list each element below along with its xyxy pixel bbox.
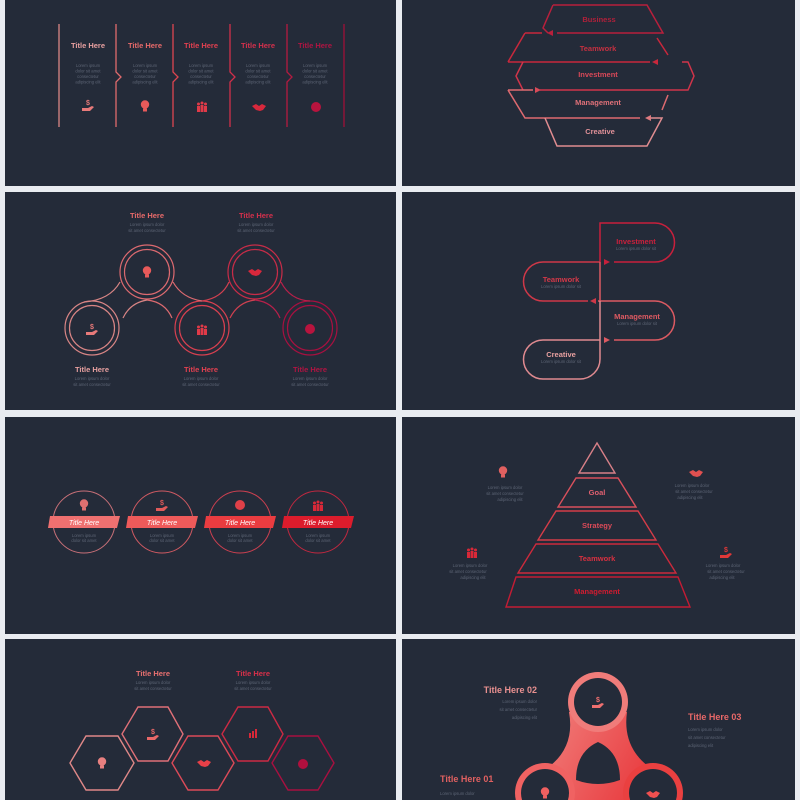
labels bbox=[541, 237, 660, 364]
labels: Title Here 03 bbox=[688, 712, 741, 722]
titles and text: Title Here bbox=[130, 211, 164, 220]
labels: adipiscing elit bbox=[512, 715, 538, 720]
labels: sit amet consectetur bbox=[688, 735, 726, 740]
titles bbox=[71, 41, 332, 50]
lorem texts: dolor sit amet bbox=[188, 68, 214, 74]
panel: slide 5 circle banners: Lorem ipsum bbox=[72, 533, 97, 538]
side callouts: sit amet consectetur bbox=[449, 569, 487, 574]
side callouts: Lorem ipsum dolor bbox=[453, 563, 488, 568]
panel: slide 5 circle banners: dolor sit amet bbox=[305, 538, 331, 543]
labels: Title Here 01 bbox=[440, 774, 493, 784]
side callouts: sit amet consectetur bbox=[707, 569, 745, 574]
titles and text: sit amet consectetur bbox=[182, 382, 220, 387]
titles: Title Here bbox=[128, 41, 162, 50]
panel: slide 6 pyramid: Goal bbox=[589, 488, 605, 497]
panel: slide 4 pill flow bbox=[402, 192, 795, 410]
titles and text: Lorem ipsum dolor bbox=[239, 222, 274, 227]
lorem texts: Lorem ipsum bbox=[189, 63, 214, 68]
labels: Lorem ipsum dolor bbox=[440, 791, 475, 796]
labels: Investment bbox=[616, 237, 656, 246]
panel: slide 5 circle banners bbox=[5, 417, 396, 634]
titles: Title Here bbox=[241, 41, 275, 50]
titles and text: Lorem ipsum dolor bbox=[130, 222, 165, 227]
lorem texts: Lorem ipsum bbox=[133, 63, 158, 68]
side callouts: adipiscing elit bbox=[677, 495, 703, 500]
titles and text: sit amet consectetur bbox=[237, 228, 275, 233]
labels: Lorem ipsum dolor sit bbox=[541, 359, 582, 364]
lorem texts: adipiscing elit bbox=[75, 80, 101, 84]
panel: slide 7 hexagons: sit amet consectetur bbox=[134, 686, 172, 691]
titles and text: Title Here bbox=[293, 365, 327, 374]
titles: Title Here bbox=[298, 41, 332, 50]
labels: Lorem ipsum dolor sit bbox=[541, 284, 582, 289]
lorem texts: consectetur bbox=[190, 74, 212, 79]
labels: Creative bbox=[585, 127, 615, 136]
panel: slide 7 hexagons: Title Here bbox=[236, 669, 270, 678]
lorem texts: adipiscing elit bbox=[188, 80, 214, 84]
labels: Management bbox=[575, 98, 621, 107]
labels: Lorem ipsum dolor bbox=[502, 699, 538, 704]
titles: Title Here bbox=[71, 41, 105, 50]
labels: sit amet consectetur bbox=[500, 707, 538, 712]
titles and text: Title Here bbox=[75, 365, 109, 374]
side callouts: sit amet consectetur bbox=[675, 489, 713, 494]
banners: Title Here bbox=[303, 520, 333, 527]
lorem texts: consectetur bbox=[134, 74, 156, 79]
titles and text: Title Here bbox=[239, 211, 273, 220]
panel: slide 6 pyramid: Strategy bbox=[582, 521, 613, 530]
side callouts: adipiscing elit bbox=[709, 575, 735, 580]
titles and text bbox=[73, 211, 329, 387]
side callouts: Lorem ipsum dolor bbox=[675, 483, 710, 488]
lorem texts: consectetur bbox=[77, 74, 99, 79]
lorem texts: Lorem ipsum bbox=[76, 63, 101, 68]
titles and text: Lorem ipsum dolor bbox=[293, 376, 328, 381]
side callouts: Lorem ipsum dolor bbox=[706, 563, 741, 568]
lorem texts: dolor sit amet bbox=[245, 68, 271, 74]
lorem texts: dolor sit amet bbox=[75, 68, 101, 74]
panel: slide 5 circle banners: dolor sit amet bbox=[71, 538, 97, 543]
panel: slide 6 pyramid: Teamwork bbox=[579, 554, 616, 563]
panel: slide 6 pyramid: Management bbox=[574, 587, 620, 596]
panel: slide 7 hexagons bbox=[5, 639, 396, 800]
labels: adipiscing elit bbox=[688, 743, 714, 748]
panel: slide 5 circle banners: Lorem ipsum bbox=[306, 533, 331, 538]
icons bbox=[98, 729, 308, 769]
panel: slide 5 circle banners: Lorem ipsum bbox=[228, 533, 253, 538]
panel: slide 7 hexagons: Title Here bbox=[136, 669, 170, 678]
titles: Title Here bbox=[184, 41, 218, 50]
lorem texts: adipiscing elit bbox=[132, 80, 158, 84]
lorem texts: adipiscing elit bbox=[302, 80, 328, 84]
lorem texts bbox=[75, 63, 328, 84]
lorem texts: consectetur bbox=[247, 74, 269, 79]
side callouts: Lorem ipsum dolor bbox=[488, 485, 523, 490]
labels: Lorem ipsum dolor sit bbox=[617, 321, 658, 326]
side callouts bbox=[449, 466, 745, 580]
panel: slide 3 circle chain bbox=[5, 192, 396, 410]
labels: Management bbox=[614, 312, 660, 321]
labels: Lorem ipsum dolor bbox=[688, 727, 723, 732]
lorem texts: Lorem ipsum bbox=[246, 63, 271, 68]
lorem texts: adipiscing elit bbox=[245, 80, 271, 84]
panel: slide 8 tri-blob bbox=[402, 639, 795, 800]
labels: Business bbox=[582, 15, 616, 24]
labels: Teamwork bbox=[543, 275, 580, 284]
icons bbox=[82, 100, 321, 112]
vertical dividers with chevrons bbox=[59, 24, 344, 127]
side callouts: sit amet consectetur bbox=[486, 491, 524, 496]
panel: slide 1 timeline bbox=[5, 0, 396, 186]
banners bbox=[48, 516, 354, 528]
side callouts: adipiscing elit bbox=[497, 497, 523, 502]
labels bbox=[440, 685, 741, 796]
panel: slide 2 stacked shapes bbox=[402, 0, 795, 186]
titles and text: Lorem ipsum dolor bbox=[75, 376, 110, 381]
labels: Teamwork bbox=[580, 44, 617, 53]
lorem texts: dolor sit amet bbox=[132, 68, 158, 74]
panel: slide 7 hexagons: Lorem ipsum dolor bbox=[236, 680, 271, 685]
banners: Title Here bbox=[225, 520, 255, 527]
icons bbox=[80, 499, 323, 511]
titles and text: sit amet consectetur bbox=[291, 382, 329, 387]
panel: slide 5 circle banners: dolor sit amet bbox=[149, 538, 175, 543]
lorem texts: consectetur bbox=[304, 74, 326, 79]
labels: Investment bbox=[578, 70, 618, 79]
panel: slide 5 circle banners: dolor sit amet bbox=[227, 538, 253, 543]
blob shape bbox=[515, 672, 683, 800]
panel: slide 6 pyramid bbox=[402, 417, 795, 634]
titles and text: sit amet consectetur bbox=[128, 228, 166, 233]
labels: Lorem ipsum dolor sit bbox=[616, 246, 657, 251]
panel: slide 7 hexagons: sit amet consectetur bbox=[234, 686, 272, 691]
labels: Creative bbox=[546, 350, 576, 359]
lorem texts: dolor sit amet bbox=[302, 68, 328, 74]
labels bbox=[575, 15, 621, 136]
lorem texts: Lorem ipsum bbox=[303, 63, 328, 68]
side callouts: adipiscing elit bbox=[460, 575, 486, 580]
icons bbox=[86, 266, 315, 335]
panel: slide 7 hexagons: Lorem ipsum dolor bbox=[136, 680, 171, 685]
panel: slide 5 circle banners: Lorem ipsum bbox=[150, 533, 175, 538]
titles and text: Lorem ipsum dolor bbox=[184, 376, 219, 381]
banners: Title Here bbox=[69, 520, 99, 527]
titles and text: Title Here bbox=[184, 365, 218, 374]
labels: Title Here 02 bbox=[484, 685, 537, 695]
titles and text: sit amet consectetur bbox=[73, 382, 111, 387]
banners: Title Here bbox=[147, 520, 177, 527]
